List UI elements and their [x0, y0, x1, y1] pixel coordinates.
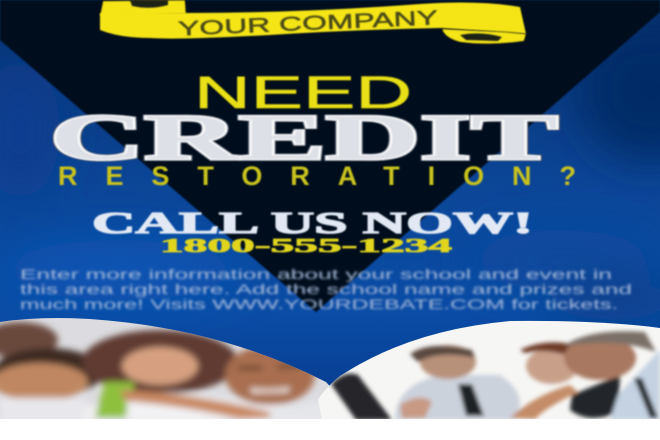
- body text: this area right here. Add the school name and prizes and: [20, 281, 632, 297]
- heading: credit: CREDIT: [50, 102, 558, 174]
- photo: business team: [318, 320, 660, 419]
- body text: Enter more information about your school and event in: [20, 266, 612, 282]
- heading: need: NEED: [194, 67, 412, 118]
- heading: credit: [50, 102, 558, 174]
- heading: credit: CREDIT: [50, 102, 558, 174]
- heading: credit: CREDIT: [50, 102, 558, 174]
- background: dark triangle: [0, 0, 660, 312]
- call to action: CALL US NOW!: [92, 205, 533, 240]
- banner text: YOUR COMPANY: [178, 7, 438, 41]
- bottom white strip: [0, 419, 660, 440]
- icon: monitor: [331, 374, 392, 420]
- phone number: 1800-555-1234: [160, 235, 452, 257]
- banner: your company ribbon: [100, 0, 526, 44]
- photo: family: [0, 318, 330, 419]
- body text: [20, 266, 632, 312]
- heading: restoration: RESTORATION?: [58, 161, 576, 191]
- body text: much more! Visits WWW.YOURDEBATE.COM for tickets.: [20, 296, 618, 312]
